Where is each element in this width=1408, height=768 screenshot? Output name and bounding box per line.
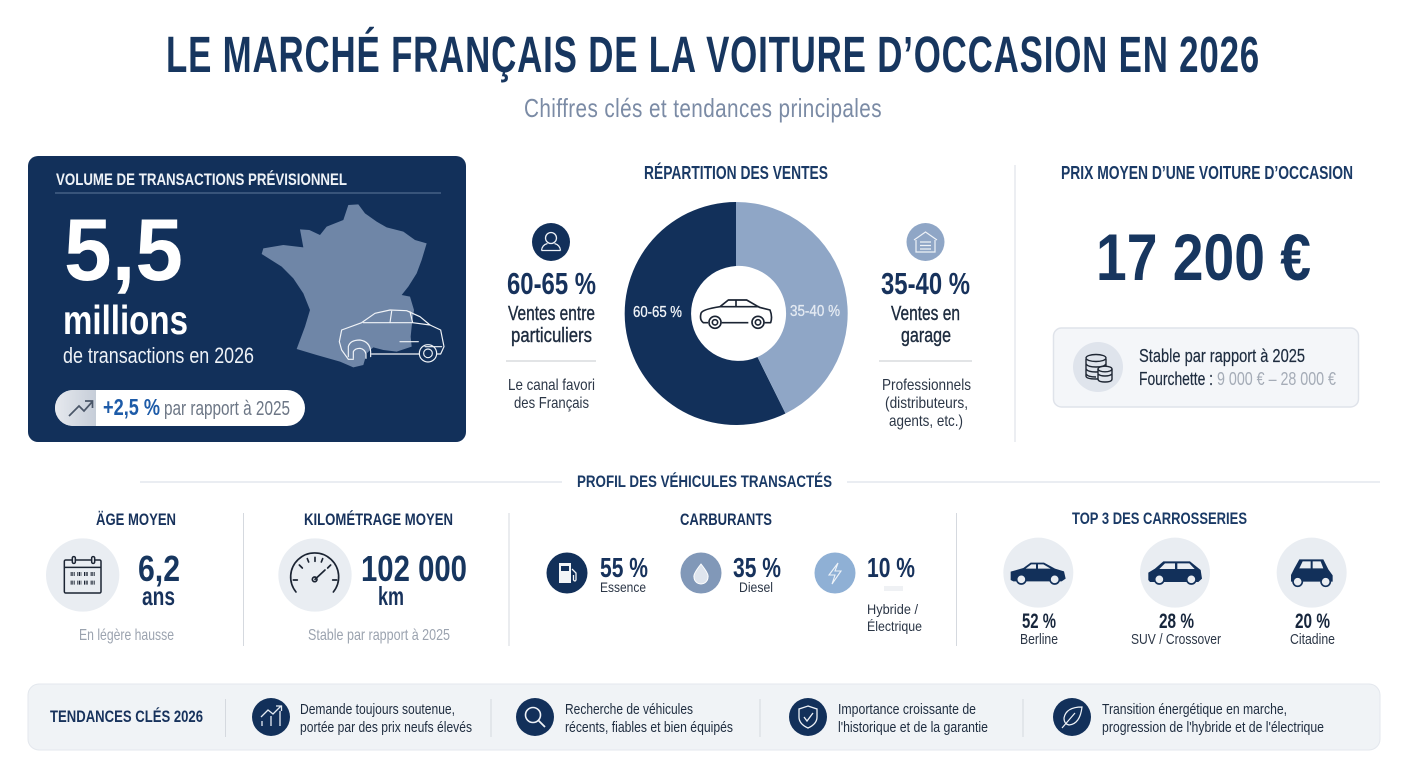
donut chart: 35-40 % — [790, 303, 840, 320]
fuel: hybride: Hybride / — [867, 601, 918, 617]
trend: transition — [1053, 698, 1324, 736]
icon: gauge — [278, 538, 352, 612]
fuel: diesel: 35 % — [733, 552, 781, 583]
stat: berline: 52 % — [1022, 610, 1056, 633]
fuel: essence — [546, 552, 648, 595]
panel: carburants: CARBURANTS — [680, 510, 772, 529]
price: 17 200 € — [1096, 220, 1311, 294]
trend: demande — [252, 698, 472, 736]
donut chart — [625, 202, 848, 425]
big number: 5,5 — [64, 200, 183, 299]
fuel: essence: 55 % — [600, 552, 648, 583]
icon: calendar — [46, 538, 119, 612]
trend pill — [55, 390, 305, 426]
description: de transactions en 2026 — [63, 343, 254, 368]
panel: top 3 carrosseries — [1003, 509, 1347, 648]
value: 102 000 — [361, 548, 467, 589]
block: garage: (distributeurs, — [885, 395, 968, 412]
icon: garage — [906, 223, 944, 261]
panel: top 3 carrosseries: SUV / Crossover — [1131, 631, 1221, 648]
trend: demande: portée par des prix neufs élevés — [300, 719, 472, 736]
trend: transition: Transition énergétique en marche, — [1102, 701, 1287, 718]
trend: historique: Importance croissante de — [838, 701, 976, 718]
heading: TENDANCES CLÉS 2026 — [50, 707, 203, 726]
trend: historique — [789, 698, 988, 736]
icon: berline — [1003, 538, 1073, 608]
icon: car — [701, 300, 772, 328]
icon: shield — [789, 698, 827, 736]
price note box: Fourchette : — [1139, 369, 1213, 389]
fuel: hybride: Électrique — [867, 618, 922, 634]
subtitle: Chiffres clés et tendances principales — [524, 93, 882, 123]
note: Le canal favori — [508, 377, 595, 394]
panel heading: VOLUME DE TRANSACTIONS PRÉVISIONNEL — [56, 170, 347, 189]
fuel: diesel — [680, 552, 781, 595]
note text: Stable par rapport à 2025 — [1139, 346, 1305, 366]
panel: âge moyen: ÄGE MOYEN — [96, 510, 176, 529]
stat: SUV: 28 % — [1159, 610, 1194, 633]
value: 35-40 % — [881, 266, 970, 301]
value: 6,2 — [138, 548, 180, 589]
value: 60-65 % — [507, 266, 596, 301]
icon: trend arrow — [69, 401, 92, 416]
fuel: hybride — [814, 552, 922, 634]
panel: répartition des ventes — [506, 162, 972, 430]
icon: fuel pump — [546, 552, 588, 594]
trend: demande: Demande toujours soutenue, — [300, 701, 455, 718]
icon: person — [532, 223, 570, 261]
icon: coins — [1073, 342, 1123, 392]
block: particuliers: des Français — [514, 395, 589, 412]
panel: volume de transactions — [28, 156, 466, 442]
icon: map of France with car — [262, 204, 444, 367]
icon: magnifier — [516, 698, 554, 736]
panel: kilométrage moyen: KILOMÉTRAGE MOYEN — [304, 510, 453, 529]
fuel: diesel: Diesel — [739, 579, 773, 595]
note: Stable par rapport à 2025 — [308, 627, 450, 644]
block: particuliers — [506, 223, 596, 412]
unit: ans — [142, 581, 175, 611]
price note box: 9 000 € – 28 000 € — [1217, 369, 1336, 389]
trend: recherche: Recherche de véhicules — [565, 701, 693, 718]
label: Ventes en — [891, 303, 960, 325]
unit: millions — [63, 297, 188, 343]
icon: lightning — [814, 552, 856, 594]
unit: km — [378, 581, 404, 611]
trend: historique: l'historique et de la garantie — [838, 719, 988, 736]
panel: top 3 carrosseries: Berline — [1020, 631, 1058, 648]
panel: top 3 carrosseries: Citadine — [1290, 631, 1335, 648]
donut chart: 60-65 % — [633, 304, 682, 321]
icon: drop — [680, 552, 722, 594]
section heading: profil: PROFIL DES VÉHICULES TRANSACTÉS — [577, 472, 832, 491]
trend: transition: progression de l'hybride et de l'électrique — [1102, 719, 1324, 736]
stat: citadine: 20 % — [1295, 610, 1330, 633]
icon: leaf — [1053, 698, 1091, 736]
panel: prix moyen — [1054, 163, 1358, 407]
trend value: +2,5 % — [103, 394, 160, 420]
trend: recherche: récents, fiables et bien équipés — [565, 719, 733, 736]
icon: SUV — [1140, 538, 1210, 608]
icon: citadine — [1277, 538, 1347, 608]
price note box — [1054, 328, 1358, 407]
fuel: hybride: 10 % — [867, 552, 915, 583]
note: Professionnels — [882, 377, 971, 394]
panel: carburants — [546, 510, 922, 634]
panel: âge moyen — [46, 510, 180, 644]
trend: recherche — [516, 698, 733, 736]
block: garage: agents, etc.) — [889, 413, 963, 430]
panel: top 3 carrosseries: TOP 3 DES CARROSSERIES — [1072, 509, 1247, 528]
panel: tendances clés — [28, 684, 1380, 750]
panel: kilométrage moyen — [278, 510, 467, 644]
fuel: essence: Essence — [600, 579, 646, 595]
note: En légère hausse — [79, 627, 174, 644]
heading: RÉPARTITION DES VENTES — [644, 162, 828, 183]
icon: chart — [252, 698, 290, 736]
label: Ventes entre — [508, 303, 595, 325]
trend text: par rapport à 2025 — [164, 398, 290, 420]
block: garage: garage — [901, 325, 951, 347]
block: garage — [879, 223, 972, 430]
block: particuliers: particuliers — [511, 325, 592, 347]
